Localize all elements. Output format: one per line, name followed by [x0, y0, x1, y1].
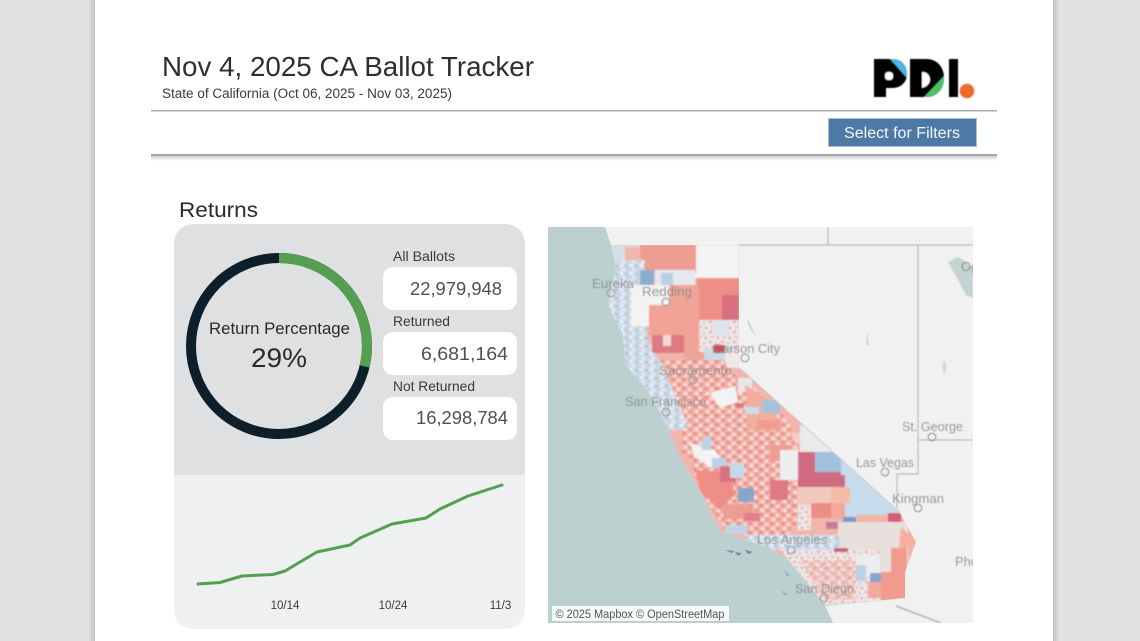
stat: not returned: Not Returned	[393, 378, 475, 394]
los angeles and san diego	[745, 535, 840, 550]
map: city markers	[607, 289, 936, 602]
map: city labels	[592, 259, 1002, 596]
map: city labels: Eureka	[592, 276, 635, 291]
stat: all ballots	[383, 248, 517, 310]
donut chart: return percentage: Return Percentage	[209, 319, 350, 338]
map: city labels: Kingman	[892, 491, 944, 506]
stat: all ballots: All Ballots	[393, 248, 455, 264]
map: city labels: Phoenix	[955, 554, 1002, 569]
map: city labels: San Francisco	[625, 394, 706, 409]
section heading: returns: Returns	[179, 199, 258, 222]
line chart: cumulative returns: 10/24	[379, 600, 408, 612]
header bottom rule with shadow	[151, 154, 997, 161]
stat: returned: 6,681,164	[421, 344, 508, 364]
map: precinct return rates	[600, 240, 920, 610]
central valley and sierra	[660, 359, 728, 422]
map: city labels: Las Vegas	[856, 455, 914, 470]
header: subtitle: State of California (Oct 06, 2025 - Nov 03, 2025)	[162, 86, 452, 101]
panel background	[174, 224, 525, 629]
map: city labels: Carson City	[713, 341, 780, 356]
stat: not returned	[383, 378, 517, 440]
map: city labels: St. George	[902, 419, 963, 434]
map: attribution: © 2025 Mapbox © OpenStreetMap	[556, 609, 724, 621]
donut chart: return percentage	[191, 258, 367, 434]
header divider	[151, 110, 997, 112]
map: city labels: Sacramento	[659, 363, 732, 378]
map: city labels: Og	[961, 259, 978, 274]
stat: not returned: 16,298,784	[416, 408, 508, 428]
header: title: Nov 4, 2025 CA Ballot Tracker	[162, 51, 534, 82]
donut chart: return percentage: 29%	[251, 343, 307, 373]
button: select for filters: Select for Filters	[844, 125, 960, 142]
panel: returns summary	[174, 224, 525, 629]
stat: returned: Returned	[393, 313, 450, 329]
map: city labels: San Diego	[795, 581, 854, 596]
map: state borders	[739, 227, 973, 623]
map base: land and ocean	[548, 227, 973, 623]
stat: returned	[383, 313, 517, 375]
line chart: cumulative returns	[198, 485, 511, 612]
central california	[682, 429, 798, 536]
logo: PDI	[874, 59, 974, 98]
map: California precincts	[548, 227, 1002, 623]
button: select for filters	[828, 118, 976, 146]
line chart: cumulative returns: 10/14	[271, 600, 300, 612]
map: city labels: Los Angeles	[757, 532, 827, 547]
map: city labels: Redding	[642, 284, 692, 299]
stat: all ballots: 22,979,948	[410, 279, 502, 299]
inland empire and eastern california	[798, 452, 845, 487]
line chart: cumulative returns: 11/3	[490, 600, 511, 612]
north	[695, 245, 739, 278]
